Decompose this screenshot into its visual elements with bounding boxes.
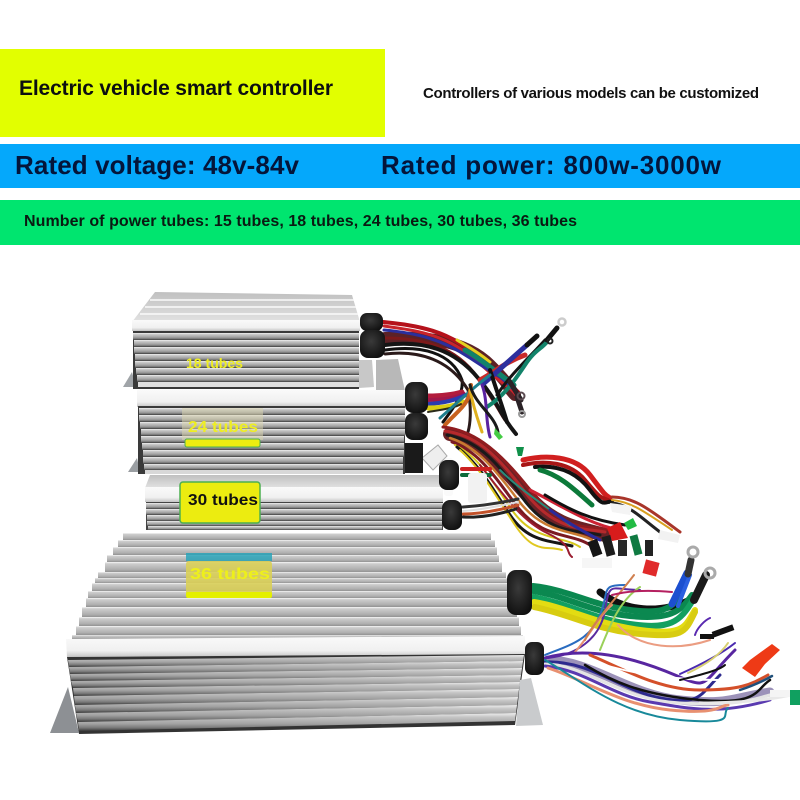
label: 24 tubes: 24 tubes <box>188 419 258 436</box>
title: Electric vehicle smart controller <box>19 77 333 100</box>
terminals and connectors <box>405 428 800 705</box>
wiring: lower multi-colour bundle <box>443 427 680 557</box>
label: 24 tubes <box>182 408 263 447</box>
wiring: 24-tube controller bundle <box>428 375 498 437</box>
customization note: Controllers of various models can be customized <box>423 85 759 102</box>
front fins <box>67 654 525 734</box>
cable glands <box>360 313 544 675</box>
right bracket <box>516 678 543 726</box>
rated power: Rated power: 800w-3000w <box>381 150 722 180</box>
controller: 36 tubes <box>50 533 543 734</box>
label: 30 tubes: 30 tubes <box>188 492 258 509</box>
controller: 24 tubes <box>128 359 405 474</box>
controller: 18 tubes <box>123 292 374 389</box>
front band <box>66 636 525 657</box>
wiring: 36-tube controller thin bundle <box>545 575 795 721</box>
label: 30 tubes <box>180 482 260 523</box>
label: 36 tubes <box>186 553 272 598</box>
rated voltage: Rated voltage: 48v-84v <box>15 150 300 180</box>
wiring: 36-tube controller thick bundle <box>533 547 715 635</box>
left bracket <box>50 687 79 733</box>
left bracket <box>123 372 136 387</box>
yellow title banner <box>0 49 385 137</box>
blue specification banner <box>0 144 800 188</box>
left bracket <box>128 458 140 472</box>
controller: 30 tubes <box>145 475 443 530</box>
power tubes text: Number of power tubes: 15 tubes, 18 tubes, 24 tubes, 30 tubes, 36 tubes <box>24 213 577 230</box>
label: 36 tubes: 36 tubes <box>190 566 270 583</box>
right bracket <box>359 360 374 388</box>
label: 18 tubes: 18 tubes <box>186 355 243 371</box>
wiring: 18-tube controller bundle <box>383 318 566 434</box>
top fins <box>72 533 523 639</box>
green power tubes banner <box>0 200 800 245</box>
